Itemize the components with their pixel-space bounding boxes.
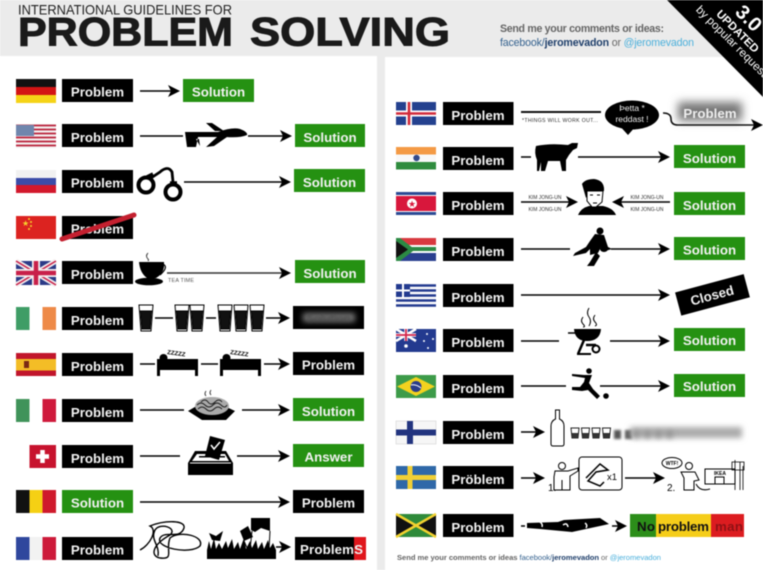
flag: Switzerland: [30, 445, 56, 468]
problem box: [443, 192, 514, 215]
flag: North Korea: ★: [408, 199, 416, 209]
solution box: Solution: [303, 266, 357, 281]
arrow: [521, 335, 670, 347]
problem box: [62, 261, 133, 284]
flag: Brazil: [396, 375, 436, 398]
row: Jamaica: [396, 514, 744, 537]
row: Brazil: [396, 368, 745, 399]
answer box: [293, 444, 364, 467]
corner ribbon: 3.0 updated: [667, 0, 763, 97]
solution box: [295, 260, 365, 283]
problem box: Problem: [71, 359, 124, 374]
problem box: [443, 147, 514, 170]
icon: barbecue: [568, 308, 601, 354]
icon: IKEA store: [696, 460, 744, 490]
solution box: [293, 398, 364, 421]
solution box: Solution: [303, 130, 357, 145]
closed sign: Closed: [689, 283, 735, 308]
left arrow with captions: KIM JONG-UN: [528, 195, 562, 201]
problem box: [443, 514, 514, 537]
problem box: [62, 353, 133, 376]
step 1 person with instruction: 1.: [548, 483, 556, 494]
solution box: [674, 328, 745, 351]
closed sign: [675, 274, 750, 316]
solution box: [183, 79, 254, 102]
row: Greece: [396, 274, 750, 316]
problem box: Problem: [71, 84, 124, 100]
icon: ballot box: [188, 436, 233, 475]
icon: tangled bureaucracy scribble: [140, 522, 201, 558]
header contact text: Send me your comments or ideas:: [500, 23, 664, 35]
panel: right guidelines: [385, 57, 763, 570]
problem box: Problem: [451, 290, 505, 305]
problem box: Pröblem: [451, 472, 505, 487]
corner ribbon: 3.0 updated: UPDATED: [714, 8, 761, 55]
row: China: [16, 215, 134, 239]
problem box: [443, 329, 514, 352]
icon: tea cup: [135, 253, 165, 285]
problem box: [62, 170, 133, 193]
solution box: Solution: [683, 151, 736, 166]
problem box: Problem: [71, 222, 124, 236]
problem box: [443, 421, 514, 444]
speech bubble: petta reddast: Þetta *: [619, 103, 645, 113]
no problem man box: [630, 514, 744, 537]
solution box: Solution: [683, 242, 736, 258]
no problem man box: problem: [658, 519, 709, 534]
problem box: [62, 537, 133, 560]
problem box: [62, 445, 133, 468]
icon: rugby player: [573, 228, 612, 266]
header title: [18, 2, 450, 54]
problem box: Problem: [302, 358, 355, 372]
row: South Africa: [396, 228, 745, 266]
row: Switzerland: [30, 436, 364, 475]
row: Russia: [16, 168, 365, 200]
icon: row of shot glasses fading into blur: [571, 427, 742, 439]
arrow: [521, 380, 670, 392]
icon: handcuffs: [138, 168, 180, 200]
problem box: Problem: [71, 313, 124, 328]
solution box: [674, 374, 745, 397]
flag: North Korea: [396, 192, 436, 215]
solution box: Solution: [683, 333, 736, 348]
flag: India: [396, 147, 436, 170]
icon: siesta bed: [157, 350, 198, 376]
blurred problem box: [678, 102, 742, 121]
blurred solution box: Solution: [306, 313, 351, 325]
footer contact text: Send me your comments or ideas facebook/jeromevadon or @jeromevadon: [397, 553, 661, 562]
step 2 person with WTF bubble: 2.: [667, 483, 675, 494]
problem box: Problem: [451, 520, 505, 535]
problem box: Problem: [451, 381, 505, 396]
blurred problem box: Problem: [683, 106, 737, 121]
arrow: [276, 541, 291, 553]
problem box: Problem: [302, 496, 355, 510]
row: Australia: [396, 308, 745, 354]
flag: Greece: [396, 284, 436, 307]
problem box: Problem: [451, 244, 505, 259]
curved arrow: [663, 113, 763, 131]
flag: UK: [16, 261, 56, 285]
solution box: [674, 145, 745, 168]
problem box: [293, 490, 364, 513]
flag: France: [16, 537, 56, 560]
problemS box: [295, 537, 366, 560]
icon: cow: [535, 143, 578, 171]
row: France: [16, 518, 366, 560]
arrow with sleeping beds: [140, 358, 290, 370]
arrow: [521, 151, 670, 163]
blurred solution box: [293, 306, 364, 329]
arrow: [521, 472, 545, 484]
answer box: Answer: [304, 450, 353, 464]
icon: joint: [521, 518, 609, 532]
arrow: [167, 267, 291, 279]
header contact text: [500, 23, 694, 49]
arrow: [140, 496, 290, 508]
arrow: [612, 520, 627, 532]
flag: Australia: [396, 329, 436, 352]
solution box: Solution: [302, 404, 355, 419]
flag: Sweden: [396, 466, 436, 489]
speech bubble: petta reddast: reddast !: [615, 114, 649, 124]
problem box: [443, 466, 514, 489]
icon: Kim Jong-un portrait: [578, 179, 616, 215]
row: Belgium: [16, 490, 364, 513]
flag: Iceland: [396, 102, 436, 125]
no problem man box: man: [715, 519, 743, 534]
solution box: Solution: [71, 496, 124, 510]
icon: football player: [572, 368, 609, 399]
problem box: Problem: [71, 542, 124, 558]
connecting arrow: [155, 312, 290, 324]
row: Sweden: [396, 457, 744, 494]
row: North Korea: [396, 179, 745, 215]
row: USA: [16, 123, 365, 148]
row: Spain: [16, 350, 364, 376]
step 1 person with instruction: [548, 462, 578, 494]
flag: USA: [16, 124, 56, 148]
problem box: [293, 352, 364, 375]
line with caption: *THINGS WILL WORK OUT...: [522, 118, 598, 124]
problem box: [62, 307, 133, 330]
step 2 person with WTF bubble: [662, 458, 699, 494]
right arrow with captions: KIM JONG-UN: [630, 207, 664, 213]
problem box: Problem: [451, 198, 505, 213]
solution box: Solution: [303, 175, 356, 190]
arrow: [625, 472, 665, 484]
flag: Jamaica: [396, 514, 436, 537]
arrow: [521, 426, 545, 438]
solution box: Solution: [192, 84, 245, 100]
solution box: [62, 490, 133, 513]
arrow with drone: [140, 130, 292, 142]
problem box: Problem: [71, 405, 124, 420]
flag: South Africa: [396, 238, 436, 261]
solution box: [295, 124, 365, 147]
problem box: [62, 124, 133, 147]
arrow: [184, 176, 291, 188]
flag: Russia: [16, 170, 56, 193]
flag: Italy: [16, 399, 56, 422]
header title: SOLVING: [250, 10, 450, 54]
solution box: [294, 169, 365, 192]
problem box: [443, 238, 514, 261]
left arrow with captions: KIM JONG-UN: [528, 207, 562, 213]
instruction box x1: [579, 457, 622, 490]
arrow: [140, 404, 290, 416]
icon: drone: [185, 123, 247, 147]
problem box: Problem: [71, 267, 124, 282]
problem box: [443, 284, 514, 307]
solution box: [674, 192, 745, 215]
problem box: Problem: [71, 451, 124, 466]
flag: Ireland: [16, 307, 56, 330]
right arrow with captions: KIM JONG-UN: [630, 195, 664, 201]
solution box: Solution: [683, 379, 736, 394]
flag: Spain: [16, 353, 56, 376]
problem box: [443, 102, 514, 125]
arrow: [140, 450, 290, 462]
line with caption: [521, 112, 601, 124]
problemS box: ProblemS: [300, 542, 363, 557]
problem box: [62, 399, 133, 422]
arrow: [521, 243, 670, 255]
instruction box x1: x1: [607, 472, 617, 483]
header title: INTERNATIONAL GUIDELINES FOR: [18, 2, 232, 18]
row: India: [396, 143, 745, 171]
icon: vodka bottle: [551, 410, 564, 446]
problem box: Problem: [451, 108, 505, 123]
problem box: Problem: [71, 176, 124, 190]
row: Germany: [16, 79, 254, 103]
label: tea time: TEA TIME: [168, 278, 194, 284]
solution box: [674, 237, 745, 260]
no problem man box: No: [637, 519, 655, 534]
icon: siesta bed: ZZZZZ: [230, 350, 249, 359]
icon: IKEA store: IKEA: [714, 471, 726, 477]
solution box: Solution: [683, 198, 736, 213]
problem box: Problem: [451, 427, 505, 442]
icon: siesta bed: [220, 350, 261, 376]
row: Italy: [16, 390, 364, 422]
problem box: Problem: [451, 335, 505, 350]
left arrow with captions: [521, 195, 578, 213]
row: Finland: [396, 410, 742, 446]
row: UK: [16, 253, 365, 285]
icon: siesta bed: ZZZZZ: [167, 350, 186, 359]
problem box: Problem: [71, 130, 124, 145]
header contact text: facebook/jeromevadon or @jeromevadon: [500, 37, 694, 49]
header title: PROBLEM: [18, 10, 233, 54]
problem box: Problem: [451, 153, 505, 168]
problem box: [443, 375, 514, 398]
flag: Finland: [396, 421, 436, 444]
speech bubble: petta reddast: [605, 100, 659, 135]
right arrow with captions: [612, 195, 670, 213]
arrow: [521, 289, 670, 301]
red strikethrough: [62, 215, 134, 239]
problem box: [62, 79, 133, 102]
panel: left guidelines: [0, 56, 377, 570]
arrow: [140, 85, 180, 97]
icon: protest crowd with flags: [207, 518, 276, 559]
row: Iceland: [396, 100, 763, 135]
row: Ireland: [16, 305, 364, 331]
icon: spaghetti plate: [188, 390, 235, 420]
step 2 person with WTF bubble: WTF!: [666, 461, 679, 467]
flag: Belgium: [16, 490, 56, 513]
flag: Germany: [16, 79, 56, 103]
flag: China: ★: [22, 219, 29, 228]
icon: pints of beer: [139, 305, 264, 331]
